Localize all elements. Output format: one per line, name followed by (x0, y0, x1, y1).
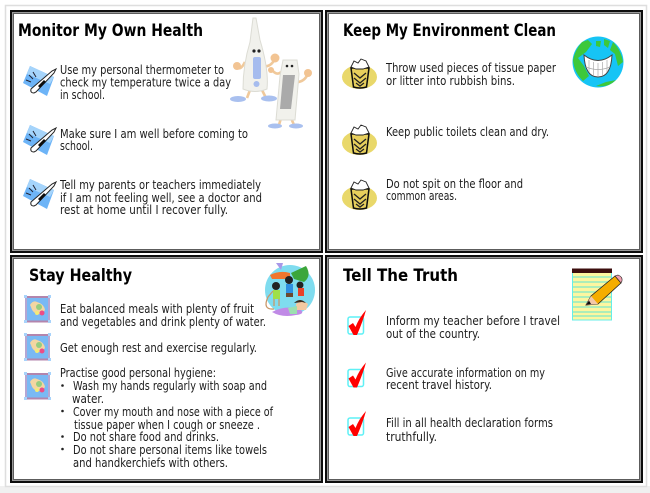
icon: fruit basket bullet 2 (24, 333, 51, 361)
text: inform teacher: out of the country. (386, 327, 480, 341)
icon: thermometer bullet 2 (23, 125, 56, 155)
text: personal hygiene list: tissue paper when I cough or sneeze . (74, 418, 260, 432)
text: balanced meals (60, 302, 266, 329)
text: health declaration: truthfully. (386, 430, 437, 444)
icon: rubbish bin 3 (342, 180, 377, 210)
heading: stay healthy: Stay Healthy (29, 266, 132, 286)
heading: keep my environment clean: Keep My Environment Clean (343, 21, 556, 41)
text: public toilets: Keep public toilets clean and dry. (386, 125, 549, 139)
icon: notepad and pencil (572, 268, 622, 320)
text: tell parents or teachers (59, 178, 262, 217)
text: personal hygiene list: Wash my hands regularly with soap and (73, 379, 267, 393)
text: travel history: recent travel history. (386, 378, 492, 392)
icon: fruit basket bullet 3 (24, 372, 51, 400)
panel: tell the truth (326, 256, 642, 482)
icon: children and healthy food (265, 263, 315, 316)
text: rubbish bins: Throw used pieces of tissue paper (385, 61, 556, 75)
text: do not spit: common areas. (386, 189, 457, 203)
heading: tell the truth: Tell The Truth (343, 266, 458, 286)
text: personal hygiene list: Cover my mouth and nose with a piece of (73, 405, 274, 419)
panel: keep my environment clean (326, 11, 642, 252)
icon: red check 1 (348, 310, 366, 335)
panel: stay healthy (11, 256, 322, 482)
text: well before school: Make sure I am well before coming to (60, 127, 248, 141)
text: well before school: school. (60, 139, 93, 153)
icon: red check 3 (348, 411, 366, 436)
text: inform teacher (386, 314, 560, 341)
text: thermometer instruction: in school. (60, 88, 105, 102)
icon: red check 2 (348, 362, 366, 388)
text: travel history: Give accurate information on my (386, 366, 545, 380)
icon: smiling earth (572, 36, 624, 88)
icon: rubbish bin 1 (342, 59, 377, 89)
heading: monitor my own health: Monitor My Own Health (18, 21, 203, 41)
text: well before school (60, 127, 248, 153)
text: thermometer instruction: check my temperature twice a day (60, 76, 231, 90)
panel: monitor my own health (11, 11, 322, 252)
text: personal hygiene list: and handkerchiefs with others. (73, 456, 228, 470)
text: tell parents or teachers: if I am not feeling well, see a doctor and (60, 191, 262, 205)
text: thermometer instruction: Use my personal thermometer to (60, 63, 224, 77)
text: thermometer instruction (60, 63, 231, 102)
text: health declaration (386, 416, 553, 444)
text: tell parents or teachers: Tell my parents or teachers immediately (59, 178, 261, 192)
text: travel history (386, 366, 545, 392)
icon: thermometer bullet 1 (23, 66, 56, 96)
text: inform teacher: Inform my teacher before I travel (386, 314, 560, 328)
text: health declaration: Fill in all health declaration forms (386, 416, 553, 430)
text: rubbish bins: or litter into rubbish bins. (386, 74, 515, 88)
icon: thermometer characters (230, 18, 312, 128)
icon: fruit basket bullet 1 (24, 295, 51, 323)
text: do not spit (386, 177, 523, 203)
text: personal hygiene list: Do not share food and drinks. (73, 430, 219, 444)
text: tell parents or teachers: rest at home until I recover fully. (60, 203, 228, 217)
text: rubbish bins (385, 61, 556, 88)
text: personal hygiene list: Practise good personal hygiene: (60, 366, 216, 380)
text: rest and exercise: Get enough rest and exercise regularly. (60, 341, 257, 355)
text: personal hygiene list (60, 366, 274, 470)
text: personal hygiene list: Do not share personal items like towels (73, 443, 267, 457)
icon: rubbish bin 2 (342, 125, 377, 155)
text: personal hygiene list: water. (72, 392, 104, 406)
text: balanced meals: Eat balanced meals with plenty of fruit (60, 302, 254, 316)
text: balanced meals: and vegetables and drink plenty of water. (60, 315, 266, 329)
icon: thermometer bullet 3 (23, 179, 56, 209)
text: do not spit: Do not spit on the floor and (386, 177, 523, 191)
